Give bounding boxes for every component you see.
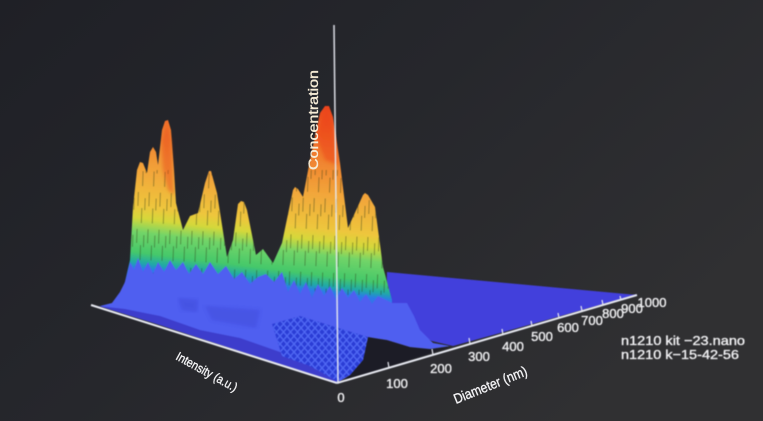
surface plot	[98, 106, 450, 383]
file info legend: n1210 kit −23.nano	[621, 333, 745, 348]
axis ticks	[388, 296, 621, 368]
axes	[91, 25, 637, 383]
surface: mesh patch, mid	[178, 298, 198, 312]
surface: blue lower body	[100, 258, 450, 383]
diameter tick labels: 200	[430, 361, 452, 376]
diameter tick labels: 100	[386, 376, 408, 391]
diameter tick labels: 1000	[638, 295, 666, 310]
surface: mesh patch, front	[272, 316, 368, 381]
file info legend	[621, 333, 745, 362]
axis title: concentration: Concentration	[306, 70, 321, 170]
diameter tick labels: 0	[337, 390, 345, 405]
floor: dark gap in front of surface	[345, 337, 450, 381]
diameter tick labels: 500	[531, 329, 553, 344]
diameter tick labels: 400	[502, 339, 524, 354]
diameter tick labels: 700	[581, 313, 603, 328]
surface: mesh lines	[272, 316, 368, 381]
diameter tick labels: 900	[621, 301, 643, 316]
surface: heat-coloured peaks	[112, 106, 392, 312]
surface: front skirt	[98, 306, 340, 383]
axis title: diameter: Diameter (nm)	[451, 363, 529, 407]
diameter tick labels	[337, 295, 666, 405]
axis title: intensity: Intensity (a.u.)	[174, 349, 240, 395]
axis: diameter	[337, 295, 637, 383]
surface: red peak core, left	[162, 125, 174, 195]
floor: blue back plane	[385, 272, 637, 346]
axis: concentration	[334, 25, 338, 383]
surface: dark mesh streaks	[120, 170, 395, 295]
axis: intensity	[91, 305, 337, 383]
diameter tick labels: 600	[557, 320, 579, 335]
diameter tick labels: 300	[468, 349, 490, 364]
surface: mesh patch, centre	[205, 306, 260, 328]
surface: red peak core, right	[316, 110, 338, 165]
file info legend: n1210 k−15-42-56	[621, 347, 739, 362]
diameter tick labels: 800	[602, 306, 624, 321]
